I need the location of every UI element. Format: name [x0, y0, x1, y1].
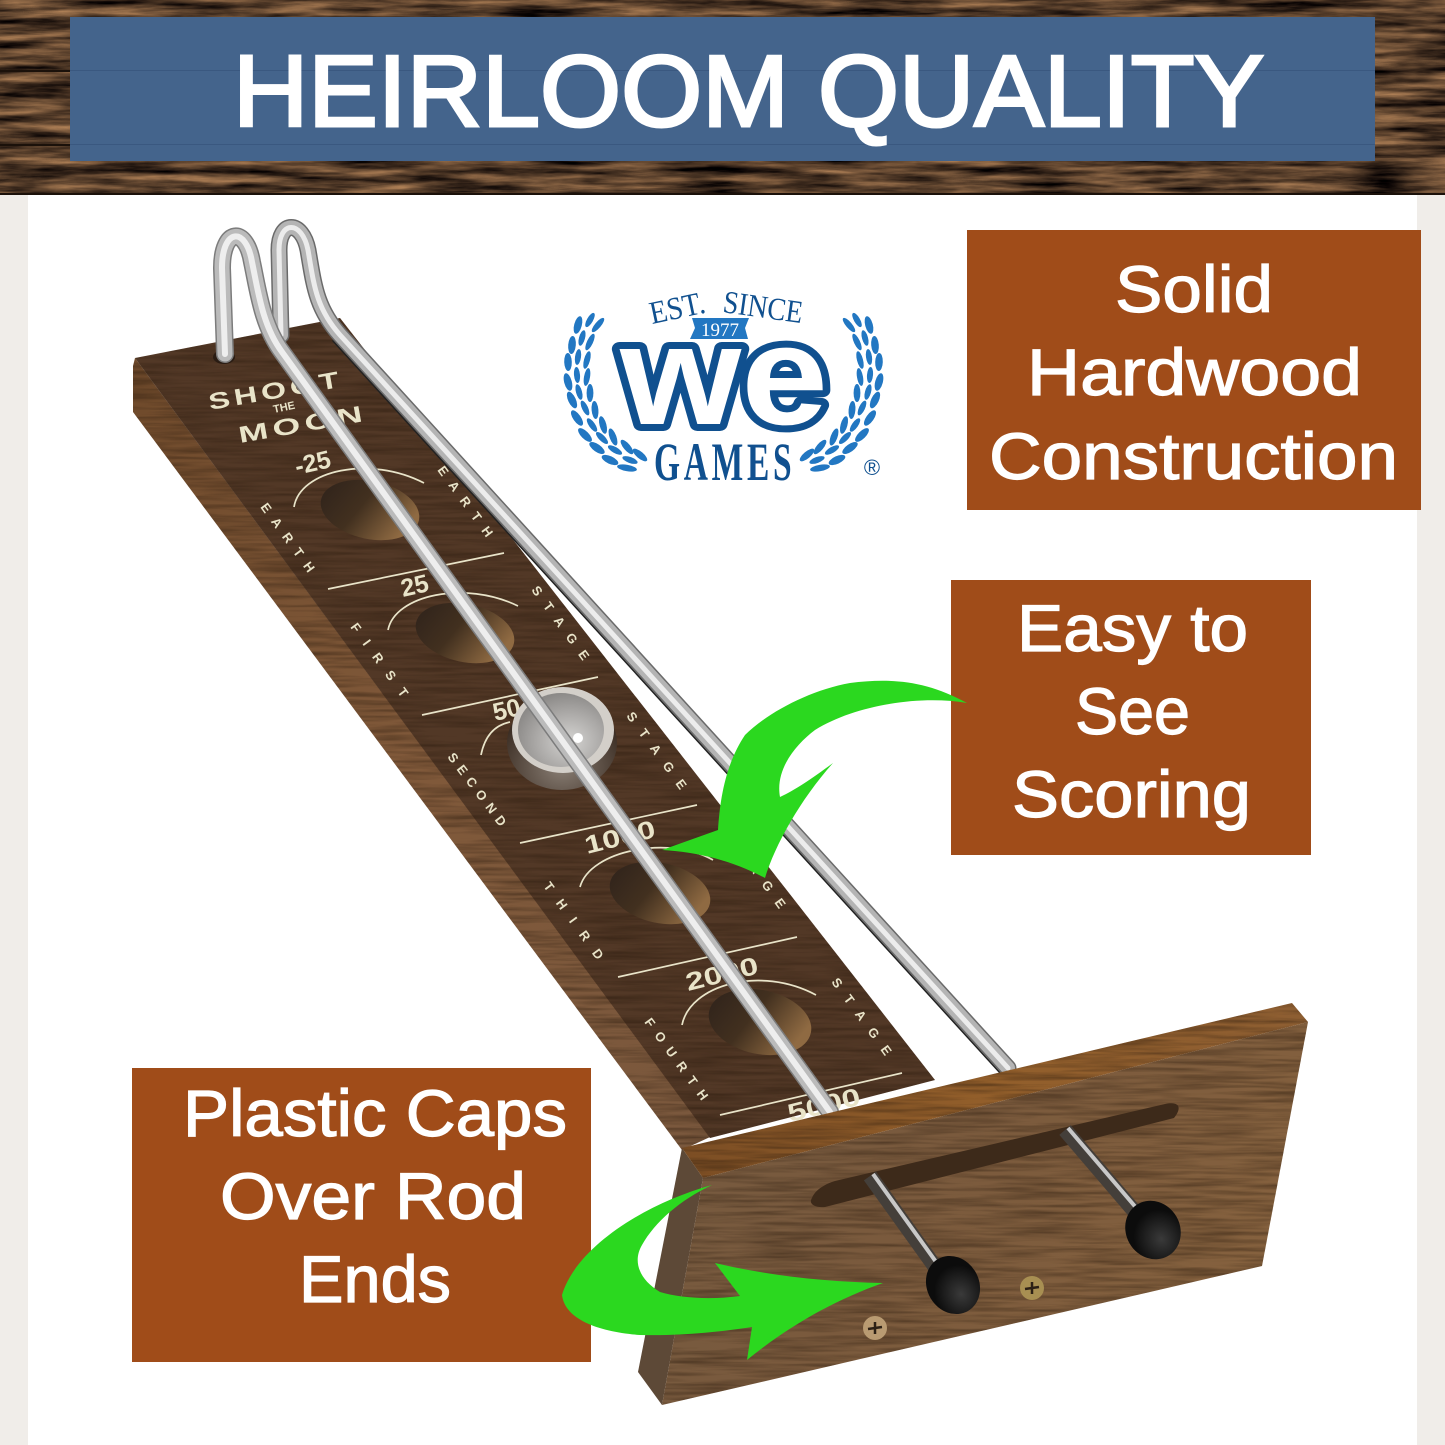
score numbers [292, 445, 863, 1128]
logo text on board: SHOOT [206, 366, 345, 415]
callout: easy to see scoring [951, 580, 1311, 855]
we wordmark: we [619, 296, 828, 455]
stage labels: STAGE [723, 828, 789, 911]
callout: solid hardwood construction: Hardwood [1027, 335, 1362, 409]
score numbers: 1000 [582, 815, 658, 860]
score numbers: 50 [490, 693, 523, 727]
score numbers: 5000 [785, 1083, 863, 1128]
front rod [222, 236, 830, 1112]
We Games logo [562, 283, 885, 492]
logo text on board [206, 366, 369, 448]
callout: plastic caps over rod ends: Ends [299, 1242, 451, 1316]
stage labels: THIRD [541, 879, 607, 962]
product: shoot the moon game board [133, 228, 1308, 1405]
plate slot [811, 1103, 1179, 1207]
callout: plastic caps over rod ends: Plastic Caps [183, 1076, 567, 1150]
logo text on board: THE [272, 400, 296, 416]
games: GAMES [654, 432, 795, 492]
screw left [863, 1316, 887, 1340]
stage labels: EARTH [258, 500, 318, 575]
plastic cap right [1115, 1191, 1191, 1269]
stage labels: EARTH [435, 463, 496, 540]
board side face [133, 358, 710, 1150]
stage labels: STAGE [529, 583, 593, 663]
callout: plastic caps over rod ends [132, 1068, 591, 1362]
1977 banner [690, 318, 749, 341]
1977 banner: 1977 [701, 320, 739, 341]
rear rod hole [213, 350, 235, 364]
score numbers: 25 [398, 569, 432, 603]
stage labels: FIRST [348, 620, 411, 700]
stage labels: STAGE [829, 975, 895, 1058]
screw right [1020, 1276, 1044, 1300]
header wood strip [0, 0, 1445, 195]
est since [646, 283, 805, 331]
title: HEIRLOOM QUALITY [233, 36, 1264, 148]
header blue banner [70, 17, 1375, 161]
rod end left [870, 1174, 949, 1282]
end plate left face [638, 1148, 703, 1405]
callout: easy to see scoring: Scoring [1012, 757, 1251, 831]
score numbers: 2000 [683, 952, 761, 997]
arrow: to plastic caps [562, 1185, 883, 1360]
score holes [315, 471, 818, 1064]
est since: SINCE [721, 283, 805, 330]
stage labels: SECOND [445, 750, 510, 829]
callout: easy to see scoring: Easy to [1017, 591, 1248, 665]
est since: EST. [646, 284, 708, 331]
registered mark: ® [864, 455, 880, 480]
logo text on board: MOON [236, 400, 369, 448]
laurel wreath [562, 312, 885, 473]
arrow: to scoring holes [662, 681, 967, 878]
stage labels [258, 463, 895, 1103]
score arcs and stage lines [294, 468, 902, 1115]
rear rod [279, 228, 1008, 1074]
end plate front face [662, 1022, 1308, 1405]
stage labels: FOURTH [642, 1015, 711, 1103]
score numbers: -25 [292, 445, 334, 481]
steel ball [507, 687, 617, 790]
callout: solid hardwood construction: Construction [989, 419, 1398, 493]
board top face [135, 318, 935, 1138]
callout: solid hardwood construction [967, 230, 1421, 510]
plastic cap left [915, 1246, 991, 1324]
callout: easy to see scoring: See [1075, 674, 1190, 748]
callout: plastic caps over rod ends: Over Rod [220, 1159, 526, 1233]
stage labels: STAGE [624, 709, 690, 792]
callout: solid hardwood construction: Solid [1115, 252, 1273, 326]
rod end right [1065, 1128, 1150, 1226]
end plate top edge [682, 1003, 1308, 1178]
